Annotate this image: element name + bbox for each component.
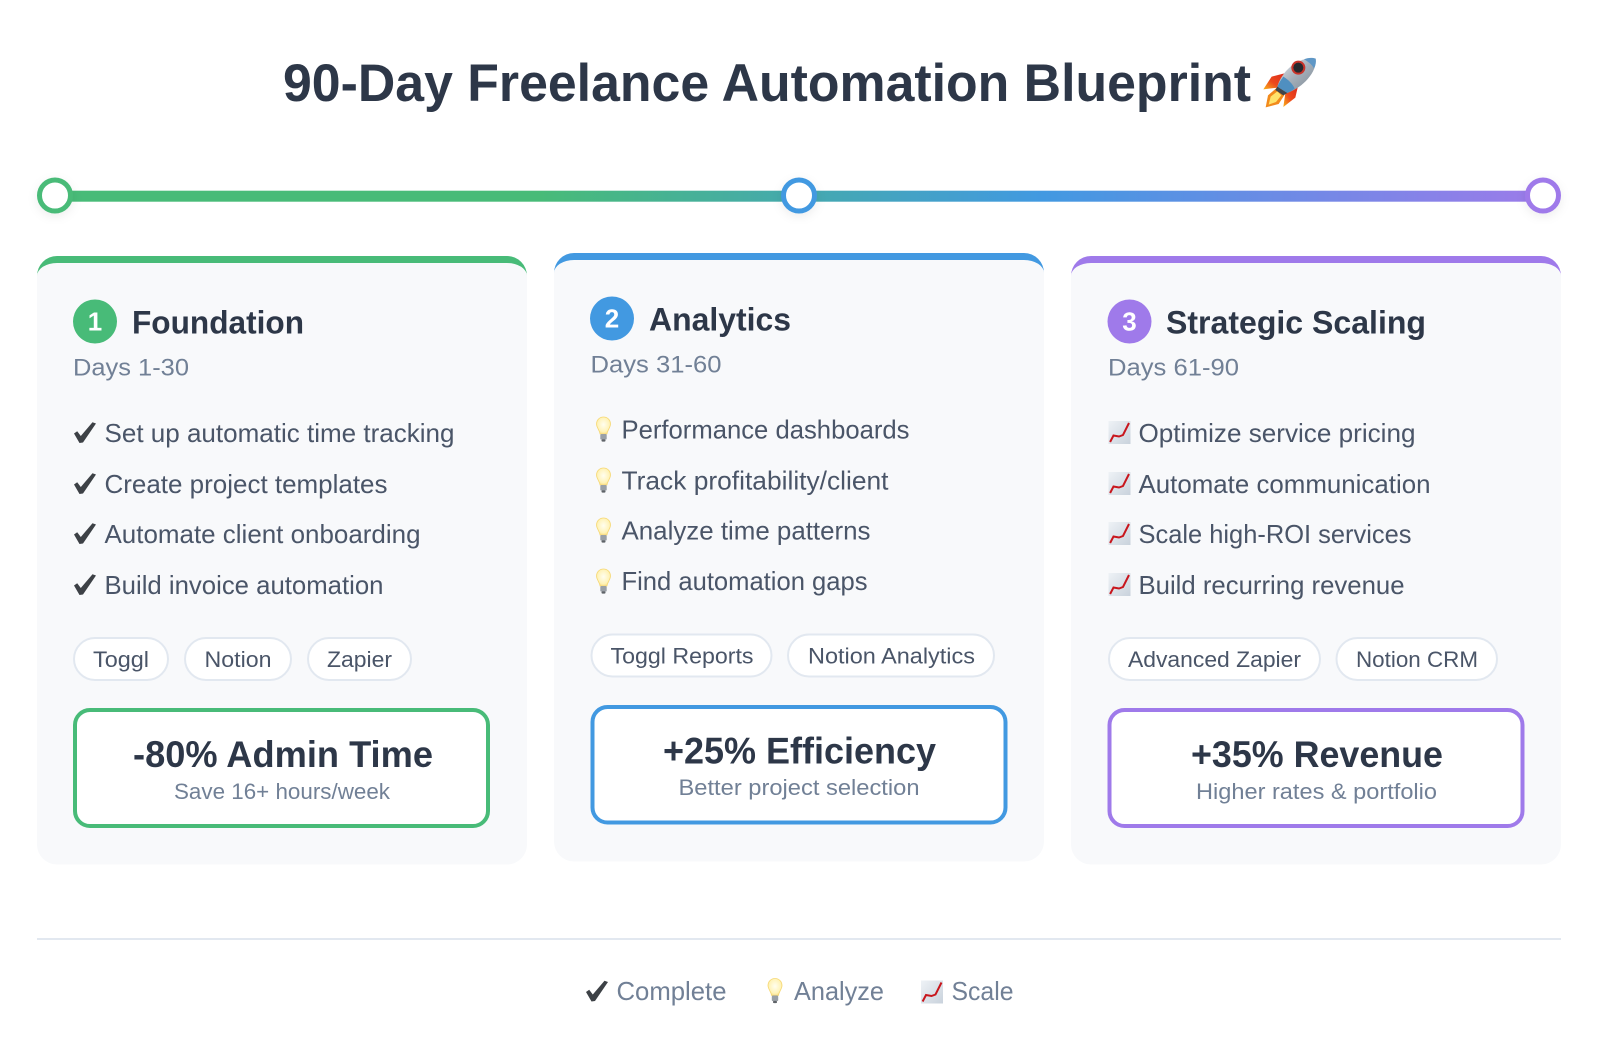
- task list: Analyze time patterns: [622, 516, 870, 546]
- footer legend: [37, 938, 1561, 1006]
- tool tags: Zapier: [327, 647, 393, 672]
- tool tags: Notion Analytics: [808, 644, 975, 668]
- timeline: [40, 180, 1558, 211]
- tool tags: [74, 638, 411, 680]
- metric callout: [75, 710, 488, 826]
- icon: rocket: [1263, 58, 1316, 107]
- task list: [74, 418, 454, 600]
- step badge: 1: [88, 306, 102, 336]
- metric callout: +25% Efficiency: [663, 730, 936, 772]
- days: Days 31-60: [590, 352, 722, 378]
- metric callout: -80% Admin Time: [133, 734, 433, 775]
- step badge: [73, 300, 117, 344]
- legend: scale: [921, 976, 1014, 1006]
- tool tags: [592, 634, 994, 676]
- task list: Build recurring revenue: [1138, 570, 1404, 600]
- tool tags: [1109, 638, 1497, 680]
- metric callout: Better project selection: [678, 775, 920, 800]
- heading: Analytics: [649, 302, 791, 338]
- tool tags: Notion: [204, 647, 272, 672]
- tool tags: Notion CRM: [1356, 647, 1478, 672]
- tool tags: Toggl Reports: [610, 644, 754, 668]
- metric callout: [1110, 710, 1522, 826]
- task list: Optimize service pricing: [1138, 418, 1416, 448]
- milestone: day 45: [784, 180, 814, 211]
- task list: [596, 414, 910, 596]
- task list: Track profitability/client: [622, 466, 889, 496]
- step badge: 3: [1122, 306, 1137, 336]
- task list: Automate communication: [1138, 469, 1430, 499]
- metric callout: +35% Revenue: [1191, 734, 1443, 775]
- legend: analyze: Analyze: [794, 976, 884, 1006]
- tool tags: Advanced Zapier: [1128, 647, 1302, 672]
- milestone: day 1: [40, 180, 70, 211]
- task list: Performance dashboards: [622, 414, 910, 444]
- title: 90-Day Freelance Automation Blueprint: [283, 54, 1251, 113]
- step badge: [1108, 300, 1152, 344]
- days: Days 61-90: [1108, 354, 1239, 382]
- step badge: 2: [605, 304, 619, 334]
- metric callout: [592, 707, 1006, 822]
- tool tags: Toggl: [93, 647, 149, 672]
- heading: Strategic Scaling: [1166, 304, 1426, 340]
- task list: Set up automatic time tracking: [104, 418, 454, 448]
- task list: Create project templates: [104, 469, 388, 499]
- task list: Find automation gaps: [622, 566, 868, 596]
- task list: Scale high-ROI services: [1138, 519, 1412, 549]
- task list: Build invoice automation: [104, 570, 384, 600]
- step badge: [590, 296, 634, 340]
- task list: Automate client onboarding: [104, 519, 420, 549]
- milestone: day 90: [1528, 180, 1558, 211]
- metric callout: Save 16+ hours/week: [174, 779, 391, 804]
- panel: analytics: [554, 253, 1044, 862]
- legend: complete: Complete: [616, 976, 726, 1006]
- days: Days 1-30: [73, 354, 189, 382]
- heading: Foundation: [132, 304, 304, 340]
- task list: [1108, 418, 1430, 600]
- panel: strategic scaling: [1071, 256, 1561, 864]
- metric callout: Higher rates & portfolio: [1196, 779, 1437, 804]
- panel: foundation: [37, 256, 527, 864]
- legend: scale: Scale: [952, 976, 1014, 1006]
